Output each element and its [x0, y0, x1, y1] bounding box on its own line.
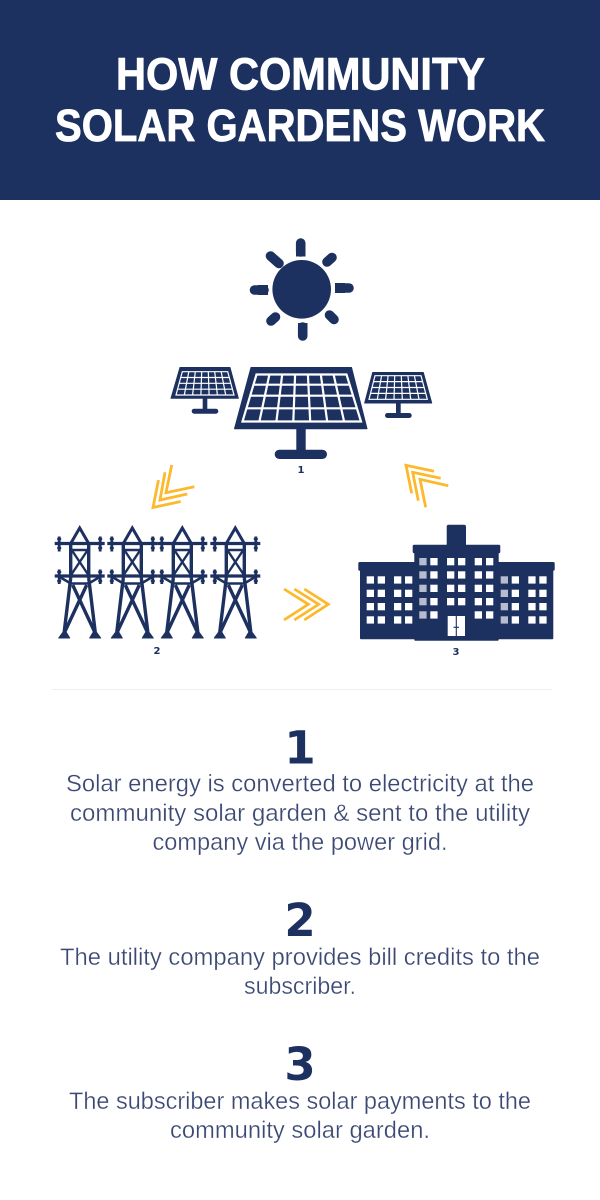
- icon: sun: [254, 243, 349, 336]
- step 3: [69, 1038, 531, 1144]
- right small panel: [365, 372, 432, 418]
- step 1 description: company via the power grid.: [152, 829, 448, 856]
- label 3: 3: [453, 647, 460, 658]
- icon: building: [358, 525, 555, 641]
- arrow: pylons to building: [284, 589, 328, 620]
- step 3 description: community solar garden.: [170, 1117, 430, 1144]
- step 2 description: subscriber.: [244, 973, 356, 1000]
- step 1: [66, 722, 534, 856]
- header band: [0, 0, 600, 200]
- title: HOW COMMUNITY: [116, 48, 485, 100]
- title: [55, 48, 545, 151]
- arrow: panels to pylons: [153, 465, 194, 508]
- step 1 description: community solar garden & sent to the utility: [70, 800, 530, 827]
- label 1: 1: [298, 465, 305, 476]
- step 1 description: Solar energy is converted to electricity at the: [66, 771, 534, 798]
- step 1 description: [66, 771, 534, 856]
- left small panel: [171, 368, 238, 414]
- arrow: building to panels: [406, 465, 448, 507]
- step 1 number: 1: [284, 722, 316, 774]
- step 2: [60, 894, 540, 1000]
- step 3 description: The subscriber makes solar payments to the: [69, 1088, 531, 1115]
- icon: solar panels: [171, 368, 432, 459]
- title: SOLAR GARDENS WORK: [55, 100, 545, 151]
- main panel: [234, 368, 367, 459]
- step 2 description: The utility company provides bill credits to the: [60, 944, 540, 971]
- step 2 number: 2: [284, 894, 316, 947]
- step 3 number: 3: [284, 1038, 316, 1091]
- label 2: 2: [154, 646, 161, 657]
- icon: power pylons: [55, 528, 260, 638]
- step 2 description: [60, 944, 540, 1000]
- step 3 description: [69, 1088, 531, 1144]
